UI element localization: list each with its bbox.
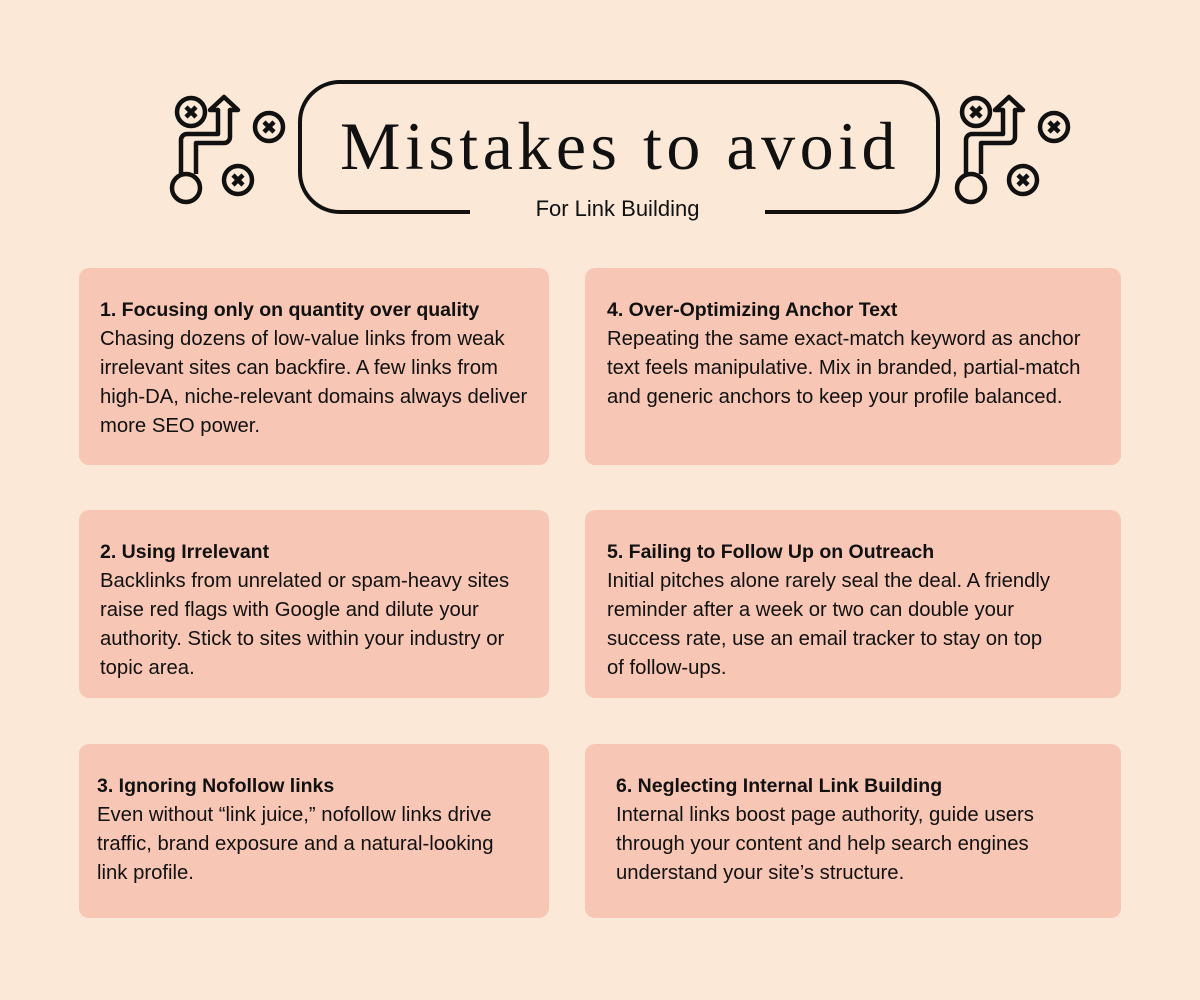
panel: mistake 4: 4. Over-Optimizing Anchor Text bbox=[607, 299, 897, 321]
panel: mistake 1: 1. Focusing only on quantity over quality bbox=[100, 299, 479, 321]
panel: mistake 4: and generic anchors to keep your profile balanced. bbox=[607, 386, 1062, 408]
panel: mistake 4: Repeating the same exact-match keyword as anchor bbox=[607, 328, 1080, 350]
panel: mistake 3: 3. Ignoring Nofollow links bbox=[97, 775, 334, 797]
panel: mistake 6: Internal links boost page authority, guide users bbox=[616, 804, 1034, 826]
panel: mistake 6: through your content and help search engines bbox=[616, 833, 1029, 855]
panel: mistake 2: Backlinks from unrelated or spam-heavy sites bbox=[100, 570, 509, 592]
panel: mistake 6 bbox=[585, 744, 1121, 918]
panel: mistake 5: 5. Failing to Follow Up on Outreach bbox=[607, 541, 934, 563]
panel: mistake 1: more SEO power. bbox=[100, 415, 260, 437]
panel: mistake 1: irrelevant sites can backfire. A few links from bbox=[100, 357, 498, 379]
panel: mistake 1: high-DA, niche-relevant domains always deliver bbox=[100, 386, 527, 408]
panel: mistake 2: topic area. bbox=[100, 657, 195, 679]
panel: mistake 6: understand your site’s structure. bbox=[616, 862, 904, 884]
subtitle: For Link Building bbox=[536, 196, 699, 221]
title: Mistakes to avoid bbox=[340, 108, 900, 184]
panel: mistake 2: authority. Stick to sites within your industry or bbox=[100, 628, 504, 650]
panel: mistake 3: link profile. bbox=[97, 862, 194, 884]
title frame bbox=[298, 80, 940, 214]
panel: mistake 3 bbox=[79, 744, 549, 918]
icon: right path with x marks bbox=[954, 94, 1070, 204]
panel: mistake 3: Even without “link juice,” nofollow links drive bbox=[97, 804, 492, 826]
panel: mistake 5: of follow-ups. bbox=[607, 657, 726, 679]
panel: mistake 5: success rate, use an email tracker to stay on top bbox=[607, 628, 1042, 650]
panel: mistake 5: reminder after a week or two can double your bbox=[607, 599, 1014, 621]
panel: mistake 5: Initial pitches alone rarely seal the deal. A friendly bbox=[607, 570, 1050, 592]
panel: mistake 2: raise red flags with Google and dilute your bbox=[100, 599, 479, 621]
panel: mistake 2: 2. Using Irrelevant bbox=[100, 541, 269, 563]
panel: mistake 1 bbox=[79, 268, 549, 465]
icon: left path with x marks bbox=[170, 94, 286, 204]
panel: mistake 4: text feels manipulative. Mix in branded, partial-match bbox=[607, 357, 1080, 379]
panel: mistake 1: Chasing dozens of low-value links from weak bbox=[100, 328, 505, 350]
panel: mistake 6: 6. Neglecting Internal Link Building bbox=[616, 775, 942, 797]
panel: mistake 4 bbox=[585, 268, 1121, 465]
panel: mistake 2 bbox=[79, 510, 549, 698]
panel: mistake 5 bbox=[585, 510, 1121, 698]
panel: mistake 3: traffic, brand exposure and a natural-looking bbox=[97, 833, 494, 855]
